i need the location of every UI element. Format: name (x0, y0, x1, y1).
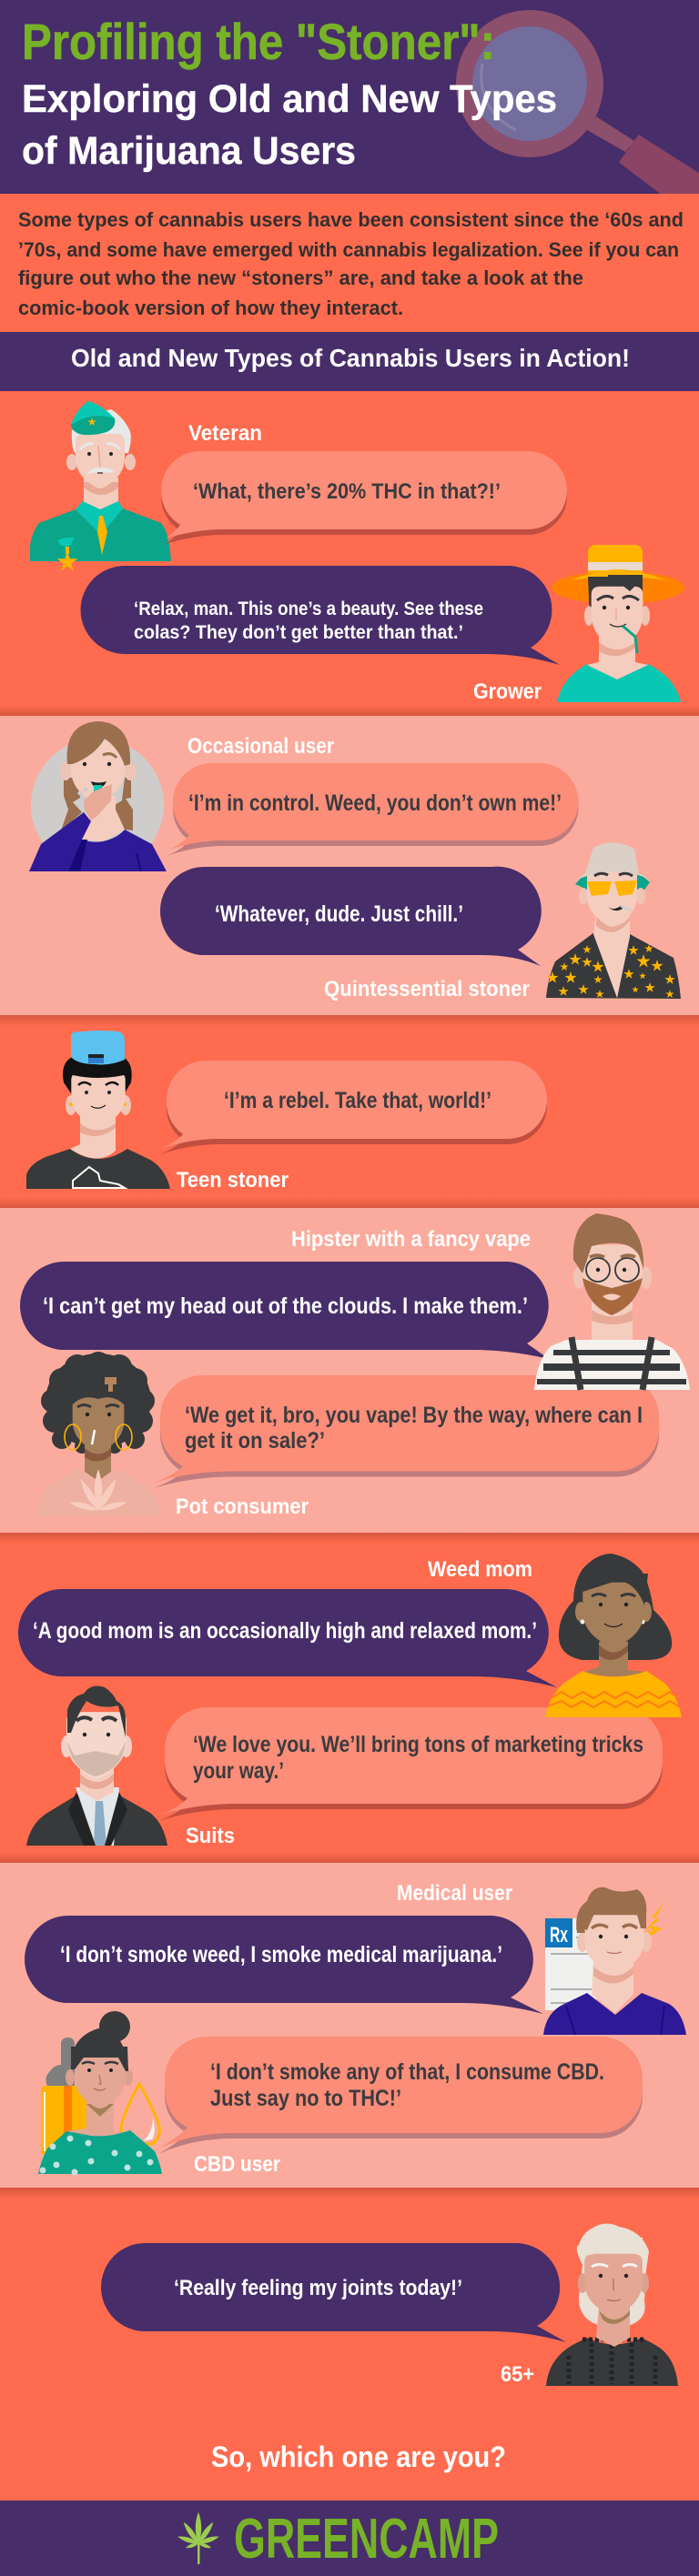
panel: occasional user and quintessential stoner (0, 716, 699, 1015)
label: 65+: 65+ (501, 2362, 534, 2387)
label: quintessential stoner: Quintessential stoner (324, 977, 530, 1001)
speech bubble: quintessential stoner (160, 867, 542, 966)
speech bubble: hipster (20, 1262, 549, 1359)
figure: veteran (30, 401, 171, 571)
label: veteran: Veteran (188, 421, 262, 446)
speech bubble: veteran (161, 451, 567, 544)
figure: pot consumer (35, 1352, 161, 1516)
speech bubble: pot consumer: get it on sale?’ (185, 1428, 325, 1454)
speech bubble: medical user: ‘I don’t smoke weed, I smoke medical marijuana.’ (60, 1942, 502, 1967)
panel: weed mom and suits (0, 1533, 699, 1863)
speech bubble: CBD user: Just say no to THC!’ (210, 2086, 401, 2111)
speech bubble: weed mom: ‘A good mom is an occasionally high and relaxed mom.’ (33, 1618, 537, 1644)
label: pot consumer: Pot consumer (176, 1494, 309, 1519)
heading: in action: Old and New Types of Cannabis Users in Action! (71, 344, 630, 372)
panel: intro text: figure out who the new “stoners” are, and take a look at the (18, 267, 583, 289)
label: suits: Suits (186, 1824, 235, 1848)
panel: hipster and pot consumer (0, 1208, 699, 1533)
panel: veteran and grower (0, 391, 699, 716)
speech bubble: weed mom (18, 1589, 557, 1687)
speech bubble: grower: colas? They don’t get better than that.’ (134, 622, 463, 643)
panel: intro text: ’70s, and some have emerged with cannabis legalization. See if you can (18, 238, 679, 261)
panel: 65+ and closing question (0, 2188, 699, 2501)
figure: medical user (543, 1887, 686, 2035)
label: occasional user: Occasional user (187, 734, 334, 759)
speech bubble: grower: ‘Relax, man. This one’s a beauty. See these (134, 599, 483, 619)
footer (0, 2501, 699, 2576)
label: weed mom: Weed mom (428, 1557, 532, 1582)
label: teen stoner: Teen stoner (177, 1168, 289, 1192)
speech bubble: grower (81, 566, 560, 665)
icon: magnifying glass (456, 10, 699, 194)
label: medical user: Medical user (397, 1881, 512, 1906)
speech bubble: occasional user: ‘I’m in control. Weed, you don’t own me!’ (188, 790, 562, 816)
title line 3: of Marijuana Users (22, 129, 356, 173)
closing question: So, which one are you? (211, 2440, 506, 2473)
label: hipster: Hipster with a fancy vape (291, 1227, 531, 1252)
figure: weed mom (545, 1554, 682, 1717)
speech bubble: pot consumer (154, 1375, 659, 1488)
panel: medical user and CBD user (0, 1863, 699, 2188)
speech bubble: quintessential stoner: ‘Whatever, dude. Just chill.’ (215, 901, 463, 927)
figure: occasional user (29, 721, 167, 871)
heading: in action (0, 332, 699, 391)
speech bubble: teen stoner (160, 1061, 547, 1154)
panel: teen stoner (0, 1015, 699, 1208)
label: grower: Grower (473, 679, 542, 704)
panel: intro text (0, 194, 699, 332)
speech bubble: suits (158, 1707, 663, 1821)
icon: cannabis leaf (177, 2512, 220, 2564)
figure: grower (552, 545, 684, 702)
logo wordmark: GREENCAMP (234, 2508, 499, 2571)
speech bubble: CBD user: ‘I don’t smoke any of that, I consume CBD. (210, 2059, 604, 2085)
figure: teen stoner (26, 1031, 170, 1189)
speech bubble: 65+: ‘Really feeling my joints today!’ (174, 2276, 462, 2300)
speech bubble: suits: your way.’ (193, 1758, 284, 1784)
speech bubble: occasional user (167, 763, 579, 856)
panel: intro text: comic-book version of how they interact. (18, 297, 403, 319)
speech bubble: hipster: ‘I can’t get my head out of the clouds. I make them.’ (43, 1293, 528, 1319)
figure: suits (26, 1686, 167, 1846)
panel: intro text: Some types of cannabis users have been consistent since the ‘60s and (18, 208, 684, 231)
speech bubble: veteran: ‘What, there’s 20% THC in that?!’ (193, 479, 501, 504)
speech bubble: teen stoner: ‘I’m a rebel. Take that, world!’ (224, 1088, 491, 1113)
speech bubble: CBD user (158, 2037, 643, 2154)
figure: hipster (534, 1213, 690, 1390)
title line 2: Exploring Old and New Types (22, 77, 557, 121)
speech bubble: pot consumer: ‘We get it, bro, you vape! By the way, where can I (185, 1403, 643, 1428)
speech bubble: 65+ (101, 2243, 566, 2342)
figure: 65+ (546, 2223, 678, 2386)
figure: medical user: Rx (550, 1923, 568, 1947)
figure: quintessential stoner (546, 842, 681, 999)
label: CBD user: CBD user (194, 2152, 280, 2177)
panel: header (0, 0, 699, 194)
figure: CBD user (38, 2011, 162, 2176)
speech bubble: medical user (25, 1916, 543, 2014)
title line 1: Profiling the "Stoner": (22, 13, 495, 70)
